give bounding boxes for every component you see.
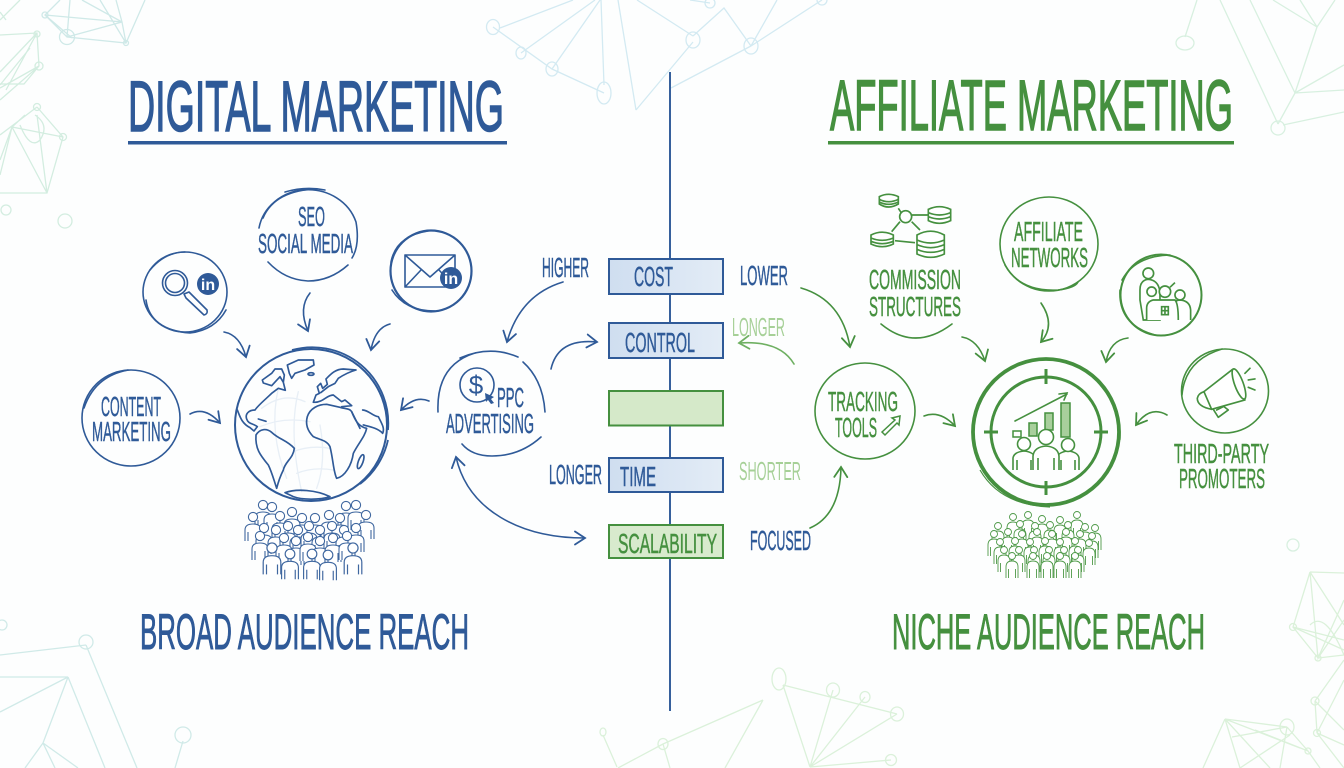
arrows: affiliate side xyxy=(739,288,850,528)
panel: comparison column: LOWER xyxy=(740,260,788,291)
node: search icon with linkedin badge xyxy=(143,252,227,333)
node: ppc advertising: $ xyxy=(469,370,484,400)
heading: digital marketing: DIGITAL MARKETING xyxy=(128,68,504,147)
node: seo and social media xyxy=(258,188,357,281)
row: cost xyxy=(542,252,788,294)
node: seo and social media: SOCIAL MEDIA xyxy=(258,228,353,259)
node: tracking tools xyxy=(815,363,915,459)
panel: digital marketing diagram xyxy=(82,188,545,580)
row: blank green box xyxy=(609,391,723,426)
row: cost: HIGHER xyxy=(542,252,589,283)
node: commission structures: COMMISSION xyxy=(869,264,961,295)
arrows into globe xyxy=(190,293,429,423)
arrows into target xyxy=(924,303,1167,426)
heading: digital marketing xyxy=(128,68,507,147)
node: email icon with linkedin badge xyxy=(390,230,472,312)
node: tracking tools: TRACKING xyxy=(828,386,898,417)
panel: comparison column: LONGER xyxy=(732,312,785,342)
node: affiliate networks: AFFILIATE xyxy=(1014,216,1083,247)
node: content marketing xyxy=(82,370,180,466)
icon: target with growth chart xyxy=(973,359,1120,507)
panel: comparison column: FOCUSED xyxy=(750,525,811,556)
row: control xyxy=(609,312,785,358)
node: affiliate networks: NETWORKS xyxy=(1011,242,1088,273)
centre divider line xyxy=(669,72,671,711)
node: content marketing: CONTENT xyxy=(101,391,161,422)
node: seo and social media: SEO xyxy=(298,201,325,232)
node: ppc advertising xyxy=(438,351,545,456)
panel: comparison column xyxy=(456,252,850,559)
row: cost: COST xyxy=(634,261,673,292)
node: third-party promoters xyxy=(1174,349,1269,494)
node: search icon with linkedin badge: in xyxy=(201,277,215,294)
row: time: LONGER xyxy=(549,459,602,490)
caption: broad audience reach: BROAD AUDIENCE REACH xyxy=(140,604,469,660)
node: commission structures xyxy=(869,194,961,338)
icon: globe xyxy=(235,347,388,501)
icon: broad audience crowd xyxy=(245,500,374,580)
node: ppc advertising: ADVERTISING xyxy=(446,408,534,439)
row: time: TIME xyxy=(620,461,656,492)
arrows: digital side xyxy=(456,282,597,538)
panel: affiliate marketing diagram: STRUCTURES xyxy=(869,291,961,322)
row: control: CONTROL xyxy=(625,327,695,358)
node: affiliate networks xyxy=(1000,197,1098,291)
panel: comparison column: SHORTER xyxy=(739,456,801,486)
node: tracking tools: TOOLS xyxy=(835,412,877,443)
node: people icon xyxy=(1120,254,1202,336)
panel: affiliate marketing diagram xyxy=(815,194,1269,578)
node: ppc advertising: PPC xyxy=(497,382,524,413)
icon: niche audience crowd xyxy=(988,512,1101,578)
node: email icon with linkedin badge: in xyxy=(444,271,458,288)
row: time xyxy=(549,456,801,492)
node: content marketing: MARKETING xyxy=(92,416,171,447)
row: scalability: SCALABILITY xyxy=(618,528,717,559)
